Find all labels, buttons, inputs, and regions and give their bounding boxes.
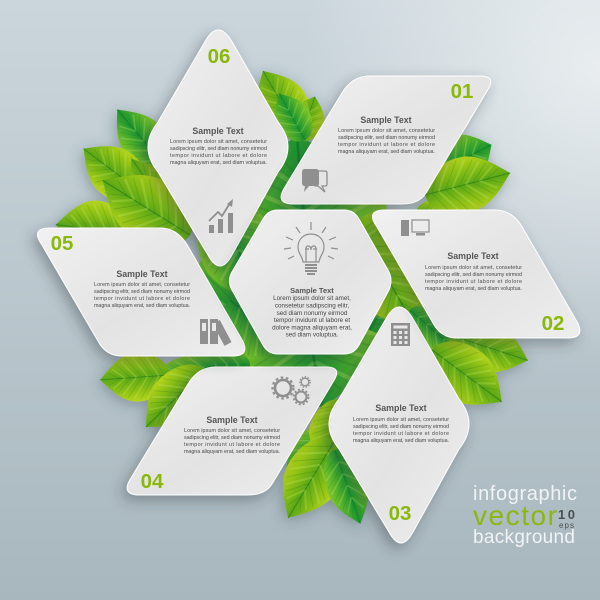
body text 04: magna aliquyam erat, sed diam voluptua. bbox=[184, 449, 280, 455]
body text 05: sadipscing elitr, sed diam nonumy eirmod bbox=[94, 289, 190, 295]
panel 01 bbox=[281, 76, 491, 204]
body text centre: sed diam nonumy eirmod bbox=[277, 310, 348, 317]
body text 03 bbox=[353, 417, 449, 444]
top leaves bbox=[241, 58, 322, 147]
body text centre: consetetur sadipscing elitr, bbox=[275, 302, 349, 310]
body text 04: sadipscing elitr, sed diam nonumy eirmod bbox=[184, 435, 280, 441]
bottom leaves bbox=[273, 413, 347, 487]
icon: light bulb bbox=[284, 222, 338, 274]
body text 03: tempor invidunt ut labore et dolore bbox=[353, 431, 449, 437]
body text 01: tempor invidunt ut labore et dolore bbox=[338, 142, 435, 148]
heading 05: Sample Text bbox=[116, 269, 168, 279]
heading 01: Sample Text bbox=[360, 115, 412, 125]
lower right leaves bbox=[399, 297, 473, 368]
body text 02 bbox=[425, 265, 522, 292]
body text 05 bbox=[94, 282, 190, 309]
body text 05: tempor invidunt ut labore et dolore bbox=[94, 296, 190, 302]
body text 06: Lorem ipsum dolor sit amet, consetetur bbox=[170, 139, 267, 145]
heading centre: Sample Text bbox=[290, 286, 334, 295]
number 04: 04 bbox=[141, 470, 164, 493]
body text centre bbox=[272, 295, 352, 338]
heading 03: Sample Text bbox=[375, 403, 427, 413]
body text centre: dolore magna aliquyam erat, bbox=[272, 324, 352, 332]
body text 02: Lorem ipsum dolor sit amet, consetetur bbox=[425, 265, 522, 271]
icon: binders bbox=[200, 319, 232, 346]
body text 06: magna aliquyam erat, sed diam voluptua. bbox=[170, 160, 267, 166]
panel 04 bbox=[127, 367, 337, 495]
icon: growth chart bbox=[209, 199, 233, 233]
number 01: 01 bbox=[451, 80, 473, 103]
body text 04: Lorem ipsum dolor sit amet, consetetur bbox=[184, 428, 280, 434]
body text 06: sadipscing elitr, sed diam nonumy eirmod bbox=[170, 146, 267, 152]
centre hexagon bbox=[230, 210, 391, 354]
body text 05: magna aliquyam erat, sed diam voluptua. bbox=[94, 303, 190, 309]
icon: calculator bbox=[391, 323, 410, 346]
icon: computer bbox=[401, 220, 429, 236]
body text 02: tempor invidunt ut labore et dolore bbox=[425, 279, 522, 285]
heading 02: Sample Text bbox=[447, 251, 499, 261]
number 06: 06 bbox=[208, 45, 230, 68]
panel 02 bbox=[372, 210, 580, 338]
green leaves ring bbox=[52, 58, 536, 532]
lower left leaves bbox=[180, 348, 250, 382]
brand text: 10 bbox=[558, 507, 575, 522]
body text centre: sed diam voluptua. bbox=[286, 332, 339, 338]
upper right leaves bbox=[427, 123, 503, 194]
upper left leaves bbox=[100, 95, 185, 184]
number 02: 02 bbox=[542, 312, 564, 335]
panel 05 bbox=[38, 228, 245, 356]
body text centre: tempor invidunt ut labore et bbox=[274, 317, 350, 324]
panel 06 bbox=[148, 30, 288, 266]
body text centre: Lorem ipsum dolor sit amet, bbox=[273, 295, 351, 302]
body text 05: Lorem ipsum dolor sit amet, consetetur bbox=[94, 282, 190, 288]
body text 06 bbox=[170, 139, 267, 166]
body text 03: sadipscing elitr, sed diam nonumy eirmod bbox=[353, 424, 449, 430]
heading 06: Sample Text bbox=[192, 126, 244, 136]
number 03: 03 bbox=[389, 502, 411, 525]
body text 04 bbox=[184, 428, 280, 455]
brand text bbox=[473, 483, 577, 548]
body text 01 bbox=[338, 128, 435, 155]
brand text: eps bbox=[559, 521, 574, 530]
body text 04: tempor invidunt ut labore et dolore bbox=[184, 442, 280, 448]
panel 03 bbox=[329, 307, 469, 543]
brand text: infographic bbox=[473, 483, 577, 505]
central fill leaves bbox=[160, 128, 465, 422]
icon: gears bbox=[272, 377, 310, 404]
body text 03: magna aliquyam erat, sed diam voluptua. bbox=[353, 438, 449, 444]
brand text: vector bbox=[473, 500, 557, 531]
body text 01: Lorem ipsum dolor sit amet, consetetur bbox=[338, 128, 435, 134]
brand text: background bbox=[473, 527, 575, 548]
body text 02: magna aliquyam erat, sed diam voluptua. bbox=[425, 286, 522, 292]
body text 01: sadipscing elitr, sed diam nonumy eirmod bbox=[338, 135, 435, 141]
body text 06: tempor invidunt ut labore et dolore bbox=[170, 153, 267, 159]
icon: speech bubbles bbox=[302, 169, 327, 192]
body text 02: sadipscing elitr, sed diam nonumy eirmod bbox=[425, 272, 522, 278]
body text 01: magna aliquyam erat, sed diam voluptua. bbox=[338, 149, 435, 155]
heading 04: Sample Text bbox=[206, 415, 258, 425]
number 05: 05 bbox=[51, 232, 73, 255]
body text 03: Lorem ipsum dolor sit amet, consetetur bbox=[353, 417, 449, 423]
